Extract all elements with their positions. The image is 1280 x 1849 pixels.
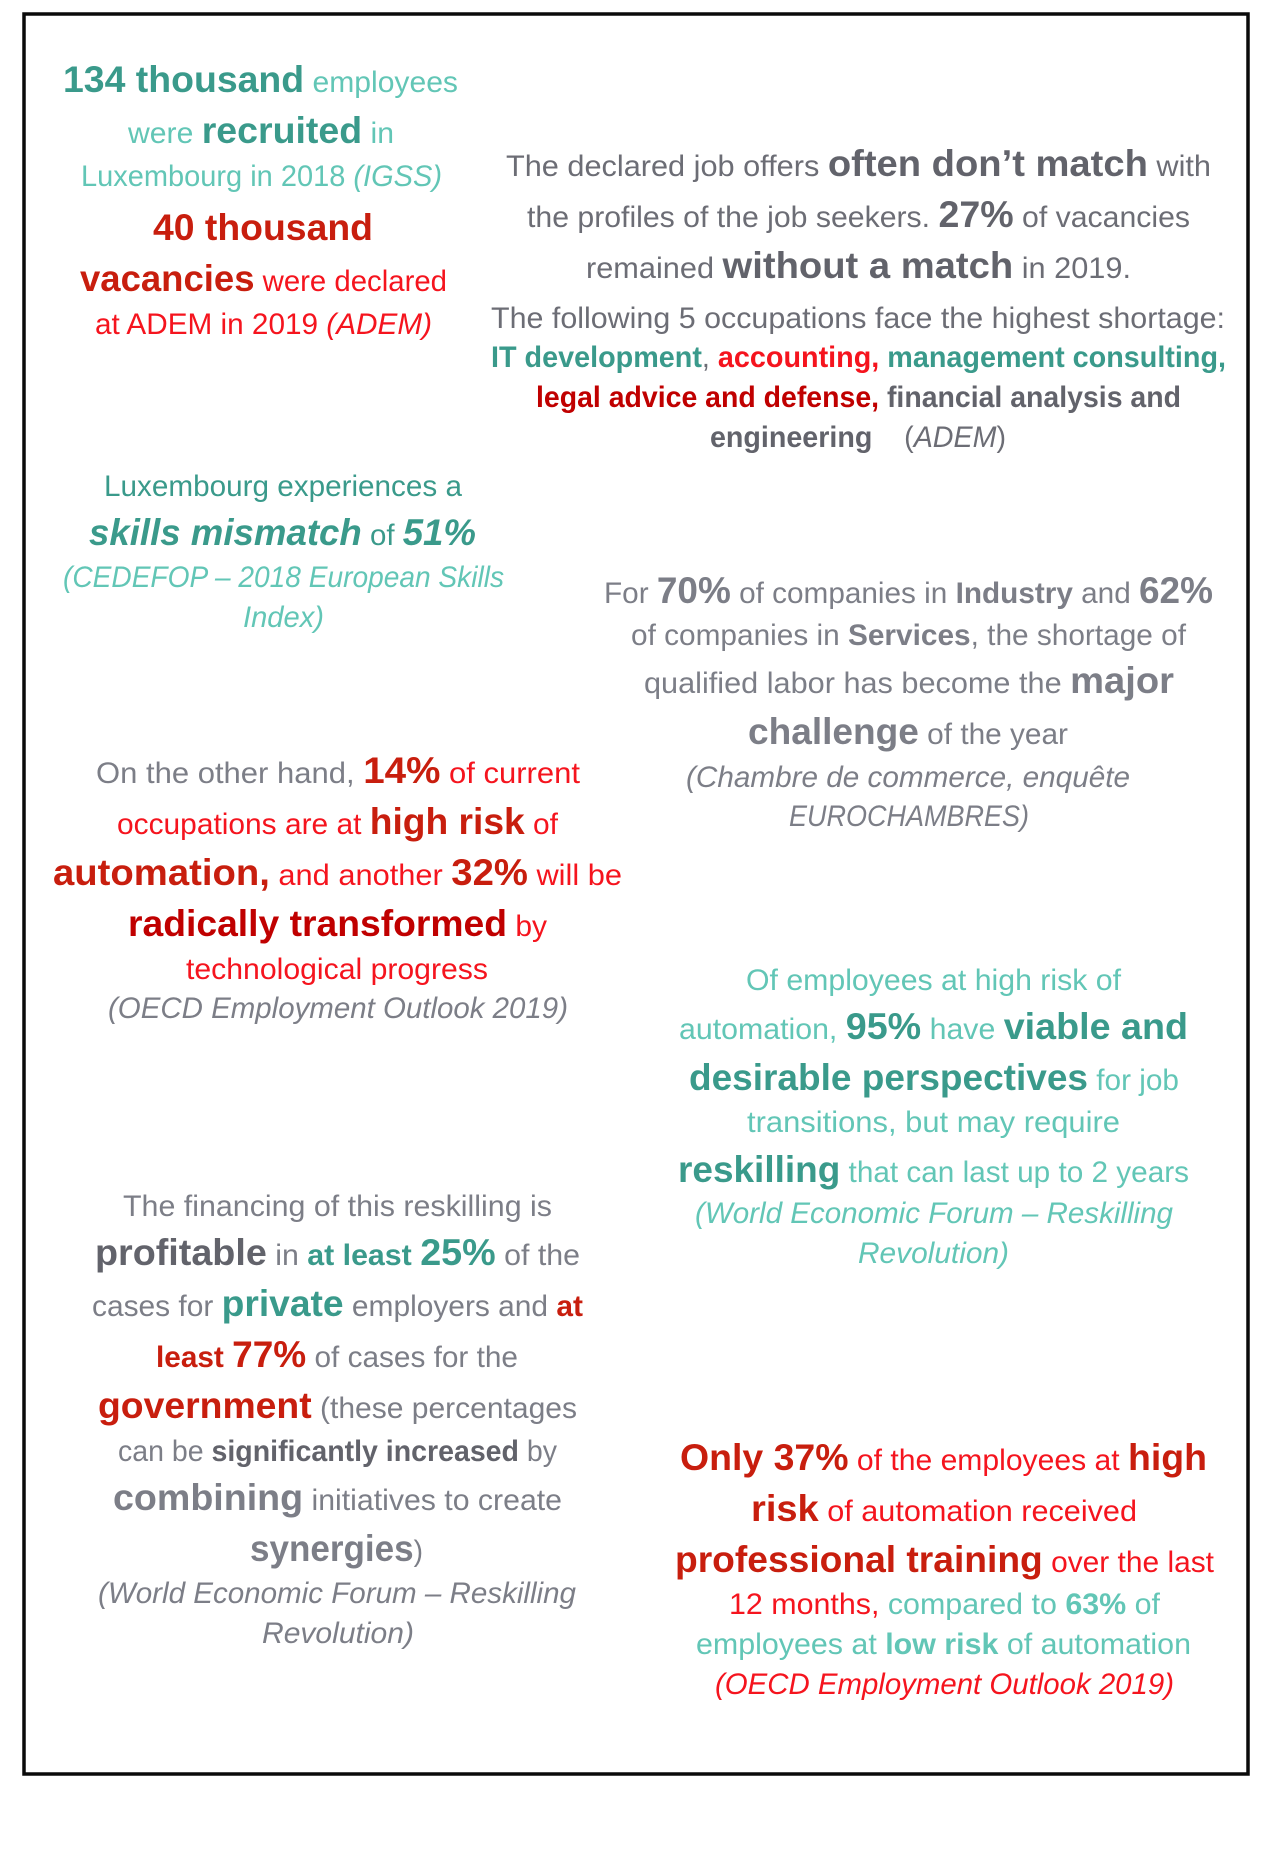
- stat: 40 thousand vacancies: at ADEM in 2019 (ADEM): [95, 308, 432, 341]
- panel: labor shortage in companies: EUROCHAMBRES): [789, 800, 1029, 833]
- panel: job offers mismatch and shortage occupations: legal advice and defense, financial analysis and: [536, 381, 1181, 414]
- stat: 40 thousand vacancies: [80, 207, 447, 341]
- panel: automation risk: occupations are at high risk of: [117, 801, 559, 842]
- panel: financing of reskilling: can be significantly increased by: [118, 1435, 557, 1468]
- panel: professional training: [675, 1437, 1214, 1701]
- panel: job transitions: Revolution): [858, 1237, 1009, 1270]
- panel: job offers mismatch and shortage occupations: The declared job offers often don’t match with: [506, 143, 1211, 184]
- panel: professional training: professional training over the last: [675, 1539, 1214, 1580]
- panel: financing of reskilling: least 77% of cases for the: [156, 1334, 518, 1375]
- panel: job transitions: Of employees at high risk of: [746, 964, 1122, 997]
- panel: labor shortage in companies: challenge of the year: [748, 711, 1068, 752]
- panel: job offers mismatch and shortage occupations: the profiles of the job seekers. 27% of vacancies: [527, 194, 1190, 235]
- panel: job transitions: (World Economic Forum – Reskilling: [695, 1197, 1174, 1230]
- panel: automation risk: [53, 750, 622, 1025]
- panel: automation risk: automation, and another 32% will be: [53, 852, 622, 893]
- panel: labor shortage in companies: qualified labor has become the major: [644, 660, 1174, 701]
- panel: automation risk: technological progress: [186, 953, 488, 986]
- panel: job offers mismatch and shortage occupations: [491, 143, 1226, 454]
- panel: skills mismatch: Index): [243, 601, 324, 634]
- panel: labor shortage in companies: [604, 570, 1213, 833]
- panel: professional training: risk of automation received: [751, 1488, 1137, 1529]
- panel: automation risk: radically transformed by: [128, 903, 547, 944]
- panel: professional training: Only 37% of the employees at high: [680, 1437, 1207, 1478]
- panel: job offers mismatch and shortage occupations: remained without a match in 2019.: [586, 245, 1131, 286]
- stat: 134 thousand recruited: Luxembourg in 2018 (IGSS): [81, 160, 442, 193]
- panel: labor shortage in companies: For 70% of companies in Industry and 62%: [604, 570, 1213, 611]
- panel: financing of reskilling: combining initiatives to create: [113, 1477, 562, 1518]
- panel: recruitment and vacancies: [63, 59, 458, 341]
- panel: financing of reskilling: cases for private employers and at: [92, 1283, 583, 1324]
- panel: financing of reskilling: synergies): [250, 1528, 423, 1569]
- panel: professional training: employees at low risk of automation: [696, 1628, 1191, 1661]
- panel: job transitions: [678, 964, 1189, 1270]
- panel: labor shortage in companies: of companies in Services, the shortage of: [631, 619, 1187, 652]
- stat: 40 thousand vacancies: 40 thousand: [153, 207, 373, 248]
- stat: 134 thousand recruited: [63, 59, 458, 193]
- panel: job offers mismatch and shortage occupations: IT development, accounting, management consulting,: [491, 341, 1226, 374]
- stat: 134 thousand recruited: 134 thousand employees: [63, 59, 458, 100]
- panel: automation risk: (OECD Employment Outlook 2019): [108, 992, 568, 1025]
- panel: job transitions: desirable perspectives for job: [689, 1057, 1179, 1098]
- panel: financing of reskilling: (World Economic Forum – Reskilling: [98, 1577, 577, 1610]
- panel: financing of reskilling: Revolution): [262, 1617, 414, 1650]
- panel: job offers mismatch and shortage occupations: engineering (ADEM): [710, 421, 1006, 454]
- panel: financing of reskilling: The financing of this reskilling is: [123, 1190, 552, 1223]
- panel: skills mismatch: (CEDEFOP – 2018 European Skills: [63, 561, 504, 594]
- panel: financing of reskilling: profitable in at least 25% of the: [95, 1232, 580, 1273]
- panel: financing of reskilling: government (these percentages: [98, 1385, 577, 1426]
- panel: job transitions: reskilling that can last up to 2 years: [678, 1149, 1189, 1190]
- panel: labor shortage in companies: (Chambre de commerce, enquête: [686, 761, 1130, 794]
- panel: job transitions: automation, 95% have viable and: [679, 1006, 1188, 1047]
- panel: financing of reskilling: [92, 1190, 583, 1650]
- panel: job transitions: transitions, but may require: [747, 1106, 1120, 1139]
- panel: professional training: 12 months, compared to 63% of: [729, 1588, 1161, 1621]
- stat: 40 thousand vacancies: vacancies were declared: [80, 258, 447, 299]
- panel: automation risk: On the other hand, 14% of current: [96, 750, 580, 791]
- panel: skills mismatch: skills mismatch of 51%: [89, 512, 476, 553]
- panel: professional training: (OECD Employment Outlook 2019): [715, 1668, 1174, 1701]
- panel: skills mismatch: [63, 470, 504, 634]
- stat: 134 thousand recruited: were recruited in: [127, 110, 394, 151]
- panel: job offers mismatch and shortage occupations: The following 5 occupations face the highest shortage:: [491, 302, 1225, 335]
- panel: skills mismatch: Luxembourg experiences a: [104, 470, 463, 503]
